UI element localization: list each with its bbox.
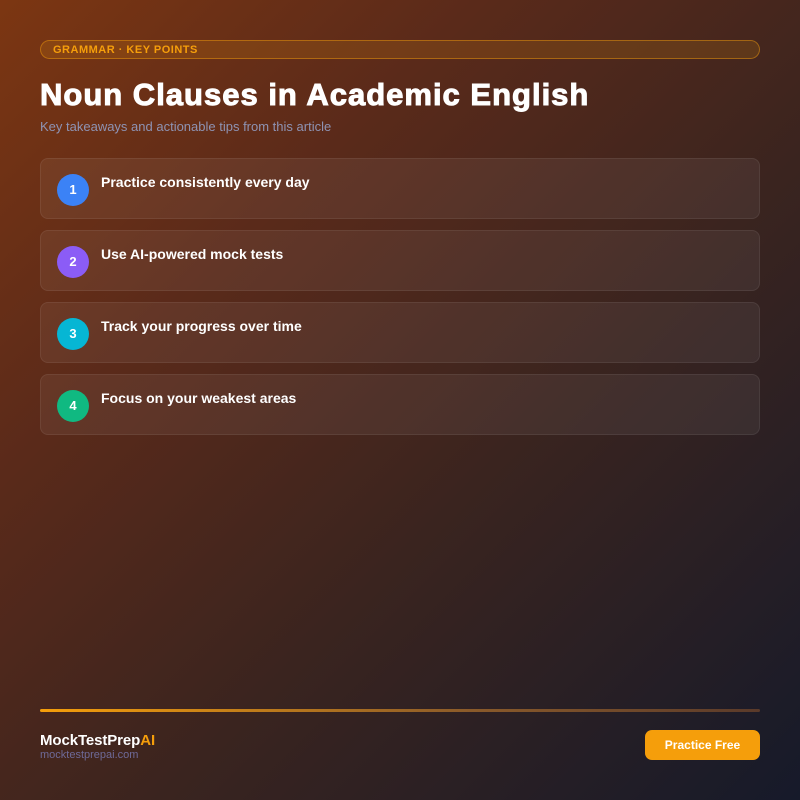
card 1 xyxy=(40,158,760,219)
card 3: Track your progress over time xyxy=(101,318,302,334)
card 4 xyxy=(40,374,760,435)
card 1: 1 xyxy=(69,182,77,197)
card 3: 3 xyxy=(69,326,77,341)
badge xyxy=(40,40,760,59)
brand: mocktestprepai.com xyxy=(40,749,138,761)
button: Practice Free xyxy=(665,738,740,752)
footer line xyxy=(40,709,760,712)
badge: GRAMMAR · KEY POINTS xyxy=(53,44,198,56)
title: Noun Clauses in Academic English xyxy=(40,77,589,112)
card 2 xyxy=(40,230,760,291)
button xyxy=(645,730,760,760)
subtitle: Key takeaways and actionable tips from this article xyxy=(40,119,331,134)
card 2: 2 xyxy=(69,254,77,269)
brand xyxy=(40,732,155,761)
card 2: Use AI-powered mock tests xyxy=(101,246,283,262)
card 3 xyxy=(40,302,760,363)
card 4: 4 xyxy=(69,398,77,413)
brand: MockTestPrepAI xyxy=(40,732,155,749)
card 4: Focus on your weakest areas xyxy=(101,390,296,406)
card 1: Practice consistently every day xyxy=(101,174,310,190)
